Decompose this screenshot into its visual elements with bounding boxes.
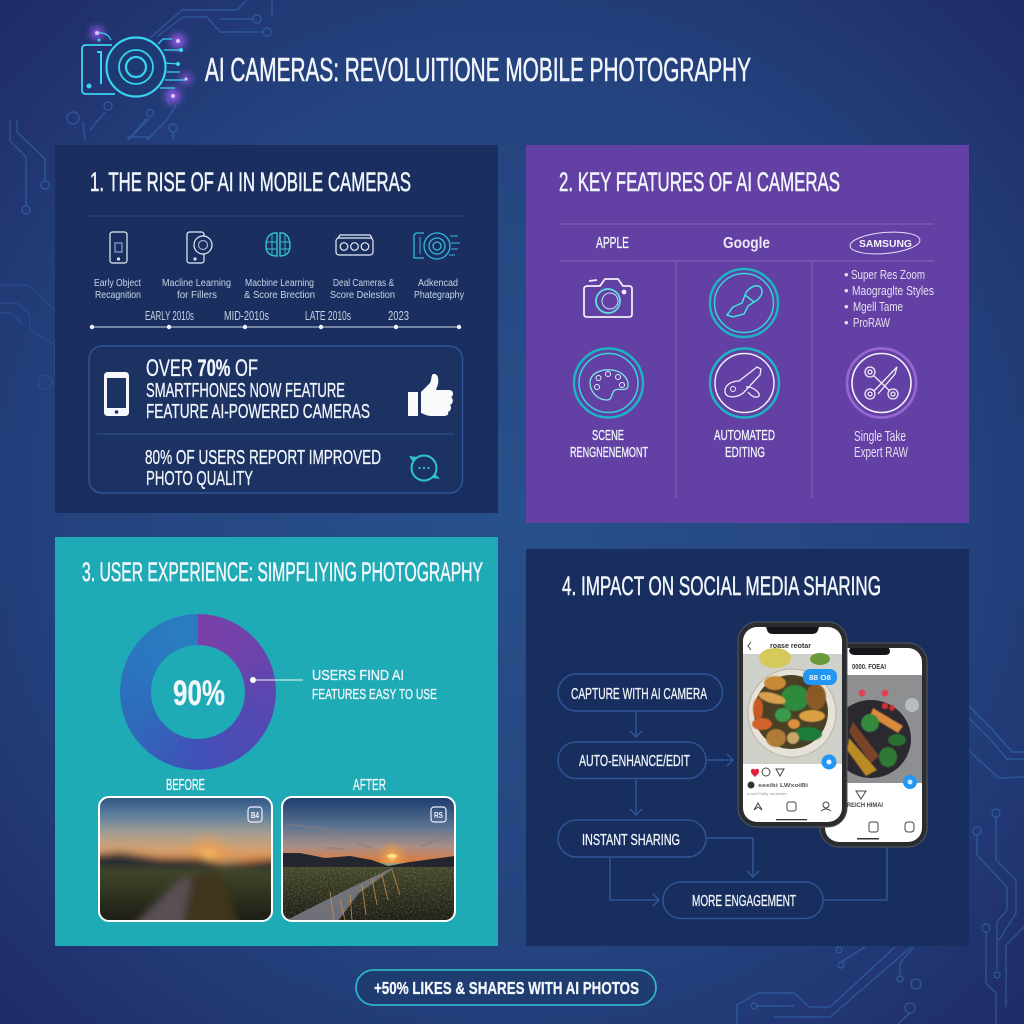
flow step: instant sharing [558,820,706,857]
feature labels: Deal Cameras & [333,277,394,289]
icon: thumbs up [408,374,453,416]
panel 2: key features [526,145,969,523]
panel 1: rise of AI [55,145,498,513]
feature labels: Macbine Learning [245,277,314,289]
stats box [89,346,462,493]
icon: palette circle [574,348,643,418]
samsung feature list: • [844,283,849,298]
samsung feature list: • [844,267,849,282]
icon: triple camera [336,235,373,255]
brand: Apple: APPLE [596,235,629,252]
photo: after: RS [434,811,444,820]
timeline [90,309,461,329]
donut callout: USERS FIND AI [312,668,404,684]
samsung feature list: • [844,315,849,330]
samsung feature list: ProRAW [853,315,891,330]
icon: phone with chip [187,232,212,263]
photo: before: B4 [251,811,259,820]
stat: 70 percent [146,355,370,423]
icon: wrench circle [710,348,779,418]
stat: 80 percent: PHOTO QUALITY [146,467,253,490]
feature labels: EDITING [725,444,765,461]
phone: back: REICH HIMAI [847,802,883,809]
panel 4: social media [526,549,969,946]
feature labels: Expert RAW [854,444,909,461]
samsung feature list: Maograglte Styles [852,283,934,298]
stat: 70 percent: FEATURE AI-POWERED CAMERAS [146,400,370,423]
footer badge: +50% LIKES & SHARES WITH AI PHOTOS [374,978,639,998]
feature labels: & Score Brection [244,289,315,301]
heading 1: 1. THE RISE OF AI IN MOBILE CAMERAS [90,167,411,197]
icon: chat bubble [409,456,440,480]
flow arrows [610,711,887,906]
footer badge [356,970,656,1005]
samsung feature list: Mgell Tame [853,299,903,314]
flow step: auto-enhance [558,742,706,778]
feature labels: Macline Learning [162,277,231,289]
samsung feature list: Super Res Zoom [851,267,925,282]
stat: 70 percent: SMARTFHONES NOW FEATURE [146,379,345,402]
flow step: capture [558,674,722,711]
heading 2: 2. KEY FEATURES OF AI CAMERAS [559,167,840,197]
donut callout: FEATURES EASY TO USE [312,687,437,703]
photo: before [98,796,273,922]
icon: camera [584,279,632,317]
icon: phone with object [110,232,127,263]
donut callout [250,668,437,703]
feature labels [570,427,909,461]
phone: back [820,643,927,847]
icon: advanced camera [414,233,460,259]
timeline: EARLY 2010s [145,309,194,323]
feature labels: RENGNENEMONT [570,444,648,461]
flow step: capture: CAPTURE WITH AI CAMERA [571,686,707,703]
feature labels: Early Object [94,277,141,289]
donut chart [120,614,276,770]
before label: BEFORE [166,777,205,794]
panel 3: user experience [55,537,498,946]
phone: front: seeiki LWxoiBi [758,783,809,789]
icon: smartphone [104,372,129,416]
phone: back: 0000. FOEAI [852,662,886,671]
timeline: 2023 [388,309,409,323]
photo: after [282,797,455,923]
flow step: instant sharing: INSTANT SHARING [582,832,680,849]
like row [751,769,759,777]
feature labels: Recagnition [95,289,141,301]
feature labels: Single Take [854,428,906,445]
samsung feature list: • [844,299,849,314]
feature labels: Adkencad [418,277,458,289]
phone: front: sooit Daily whatsbe [747,791,788,796]
flow step: more engagement [663,882,823,918]
heading 3: 3. USER EXPERIENCE: SIMPFLIYING PHOTOGRAPHY [82,557,483,587]
icon: scissors circle [847,348,916,418]
phone: front: 88 O8 [809,675,831,682]
brand: Samsung [849,229,921,257]
feature labels: for Fillers [177,289,217,301]
donut chart: 90% [173,674,225,713]
icon: brain [266,233,290,256]
feature labels: Score Delestion [330,289,395,301]
stat: 80 percent: 80% OF USERS REPORT IMPROVED [145,446,381,469]
timeline: MID-2010s [224,309,269,323]
flow step: more engagement: MORE ENGAGEMENT [692,893,796,910]
brand: Samsung: SAMSUNG [859,238,912,250]
samsung feature list [844,267,934,330]
phone: front: roase reotar [770,641,811,650]
phone: front [738,622,847,827]
stat: 70 percent: OVER 70% OF [146,355,258,382]
feature labels [94,277,465,301]
brand: Google: Google [723,235,770,252]
flow step: auto-enhance: AUTO-ENHANCE/EDIT [579,753,690,770]
stat: 80 percent [145,446,381,490]
timeline: LATE 2010s [305,309,351,323]
feature labels: AUTOMATED [714,427,775,444]
feature labels: Phategraphy [414,289,465,301]
after label: AFTER [353,777,386,794]
header logo: camera icon [82,27,191,103]
feature labels: SCENE [592,427,624,444]
icon: brush circle [710,269,778,337]
